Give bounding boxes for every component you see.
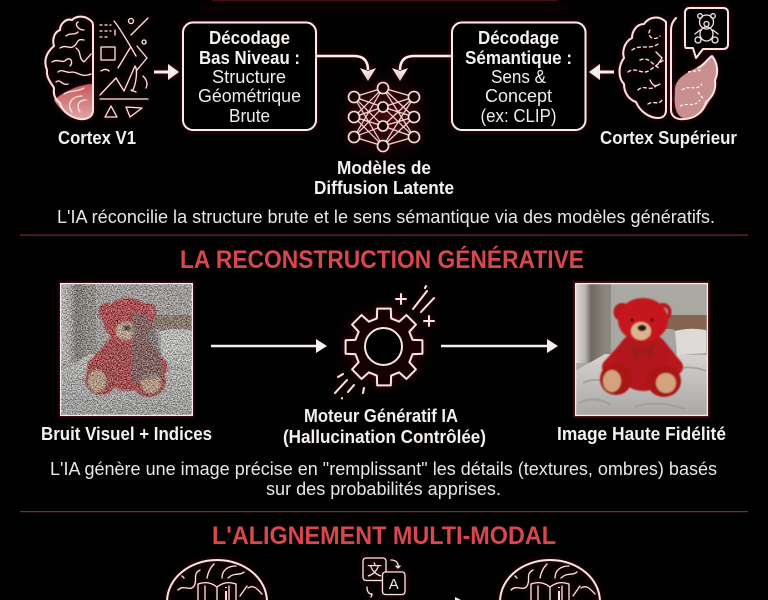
icon: cortex V1 brain with geometric shapes — [45, 17, 148, 119]
label: Cortex Supérieur: Cortex Supérieur — [600, 128, 737, 148]
arrow: engine to image — [441, 339, 558, 353]
label: generative engine — [283, 406, 486, 447]
box: low level decoding: Géométrique — [198, 86, 301, 106]
caption: generation — [50, 458, 717, 499]
label: high fidelity image: Image Haute Fidélité — [557, 424, 726, 444]
box: low level decoding: Brute — [229, 106, 270, 126]
label: diffusion models: Modèles de — [337, 158, 431, 178]
box: semantic decoding: Décodage — [478, 28, 559, 48]
heading: generative reconstruction: LA RECONSTRUCTION GÉNÉRATIVE — [180, 245, 584, 274]
icon: translation: A — [389, 576, 399, 593]
arrow: upper cortex to semantic — [589, 64, 614, 80]
arrow: noise to engine — [211, 339, 327, 353]
icon: neural network — [334, 67, 434, 167]
icon: right brain with book — [500, 560, 600, 600]
box: low level decoding: Structure — [212, 67, 286, 87]
icon: upper cortex brain with speech bubble — [620, 8, 728, 119]
arrow tip: right — [455, 597, 461, 600]
icon: translation — [363, 558, 405, 597]
label: visual noise: Bruit Visuel + Indices — [41, 424, 212, 444]
caption: decoding: L'IA réconcilie la structure brute et le sens sémantique via des modèles génératifs. — [57, 206, 715, 227]
label: diffusion models: Diffusion Latente — [314, 178, 454, 198]
heading: multi-modal alignment: L'ALIGNEMENT MULTI-MODAL — [212, 522, 556, 550]
box: semantic decoding: Sémantique : — [465, 48, 572, 68]
box: semantic decoding — [452, 22, 586, 130]
icon: gear with sparks — [332, 286, 436, 399]
clipped top heading trace — [200, 0, 570, 14]
arrow: low level to diffusion — [316, 56, 376, 81]
panel: generative reconstruction — [41, 281, 726, 499]
box: semantic decoding: Sens & — [491, 67, 546, 87]
panel: multi-modal alignment — [167, 558, 600, 600]
image: noisy teddy bear — [58, 281, 195, 418]
box: low level decoding: Décodage — [209, 28, 290, 48]
icon: translation: 文 — [367, 562, 382, 579]
box: semantic decoding: Concept — [485, 86, 552, 106]
label: diffusion models — [314, 158, 454, 198]
caption: generation: L'IA génère une image précise en "remplissant" les détails (textures, ombres) basés — [50, 458, 717, 479]
icon: left brain with book — [167, 560, 267, 600]
arrow: semantic to diffusion — [392, 56, 452, 81]
label: generative engine: Moteur Génératif IA — [304, 406, 458, 426]
label: generative engine: (Hallucination Contrôlée) — [283, 427, 486, 447]
box: low level decoding: Bas Niveau : — [199, 48, 300, 68]
caption: generation: sur des probabilités apprises. — [266, 478, 501, 499]
arrow: V1 to low level — [154, 64, 179, 80]
image: high fidelity teddy bear — [573, 281, 710, 418]
box: semantic decoding: (ex: CLIP) — [480, 106, 556, 126]
label: Cortex V1: Cortex V1 — [58, 128, 136, 148]
box: low level decoding — [183, 22, 316, 130]
panel: decoding — [45, 8, 737, 227]
